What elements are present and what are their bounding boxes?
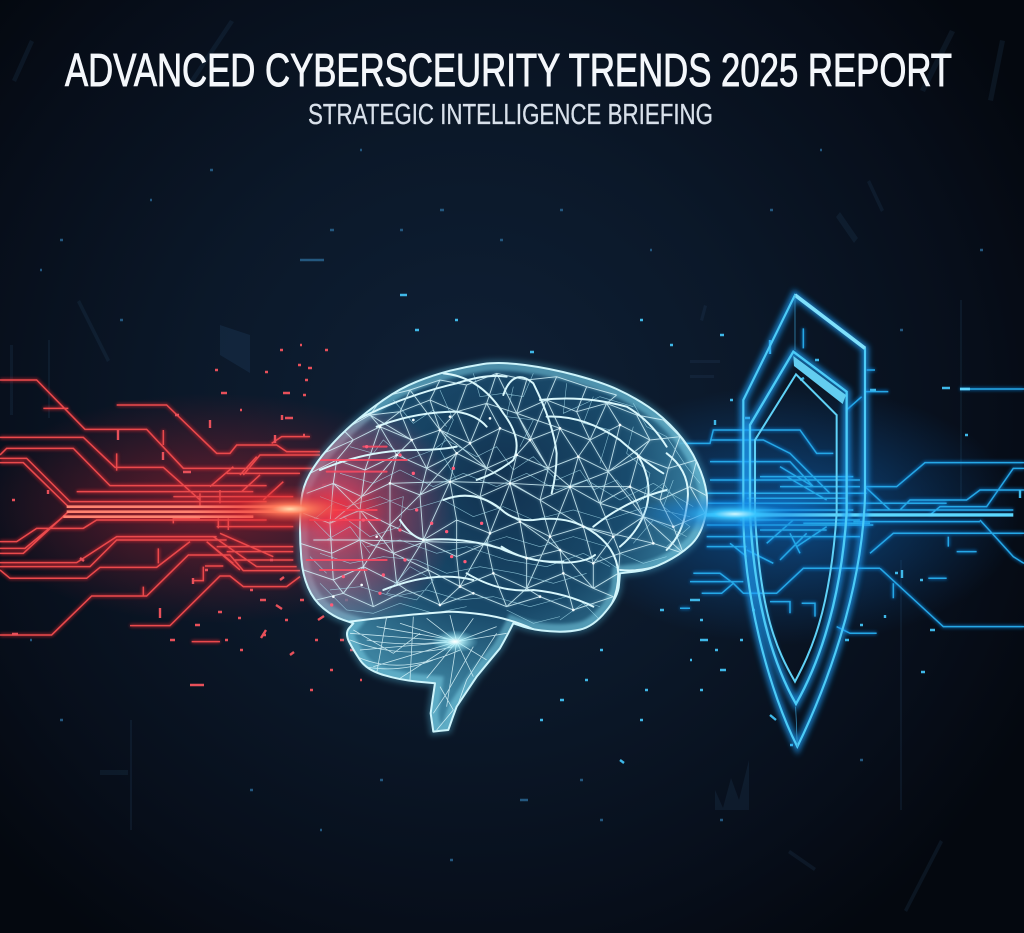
- shield middle frame: [750, 352, 847, 704]
- dim particles: [30, 150, 983, 860]
- sulci: [320, 373, 688, 629]
- red overlay streaks: [307, 447, 407, 570]
- red attack circuits: [0, 380, 333, 642]
- particles: [12, 150, 1020, 860]
- neural mesh glow: [300, 373, 708, 610]
- blue energy flare: [630, 494, 840, 534]
- brain rim light: [300, 363, 707, 732]
- red circuit glow: [0, 380, 333, 642]
- shield glow: [743, 295, 865, 747]
- brain body: [297, 357, 713, 737]
- neuron dots: [333, 417, 673, 610]
- ambient glow left: [0, 393, 455, 623]
- brain outline: [300, 363, 707, 732]
- blue defense circuits: [680, 328, 1024, 633]
- shield inner frame: [755, 374, 837, 682]
- blue circuit traces: [680, 328, 1024, 633]
- shield spine: [795, 295, 797, 747]
- cerebellum rays: [350, 615, 507, 730]
- shield thick band: [793, 356, 846, 404]
- red trunk lines: [63, 507, 300, 517]
- red trunk blur: [60, 488, 317, 530]
- blue circuit glow: [680, 328, 1024, 633]
- brain outer glow: [300, 363, 707, 732]
- blue terminal dot: [960, 385, 970, 393]
- subtitle: STRATEGIC INTELLIGENCE BRIEFING: [308, 99, 713, 131]
- cyan particles: [400, 295, 1020, 763]
- red circuit traces: [0, 380, 333, 642]
- shield top edge highlight: [795, 295, 865, 348]
- cerebellum hub glow: [432, 630, 478, 653]
- shield outer frame: [743, 295, 865, 747]
- red particles: [12, 345, 362, 690]
- shield: [743, 295, 865, 747]
- brain: [297, 357, 713, 737]
- infected red dots: [332, 447, 482, 605]
- ambient glow right: [560, 385, 1020, 645]
- neural mesh: [300, 373, 708, 610]
- red energy flare: [190, 485, 390, 533]
- secondary fine mesh: [310, 373, 700, 623]
- blue trunk blur: [703, 485, 887, 545]
- blue trunk line: [703, 510, 1013, 520]
